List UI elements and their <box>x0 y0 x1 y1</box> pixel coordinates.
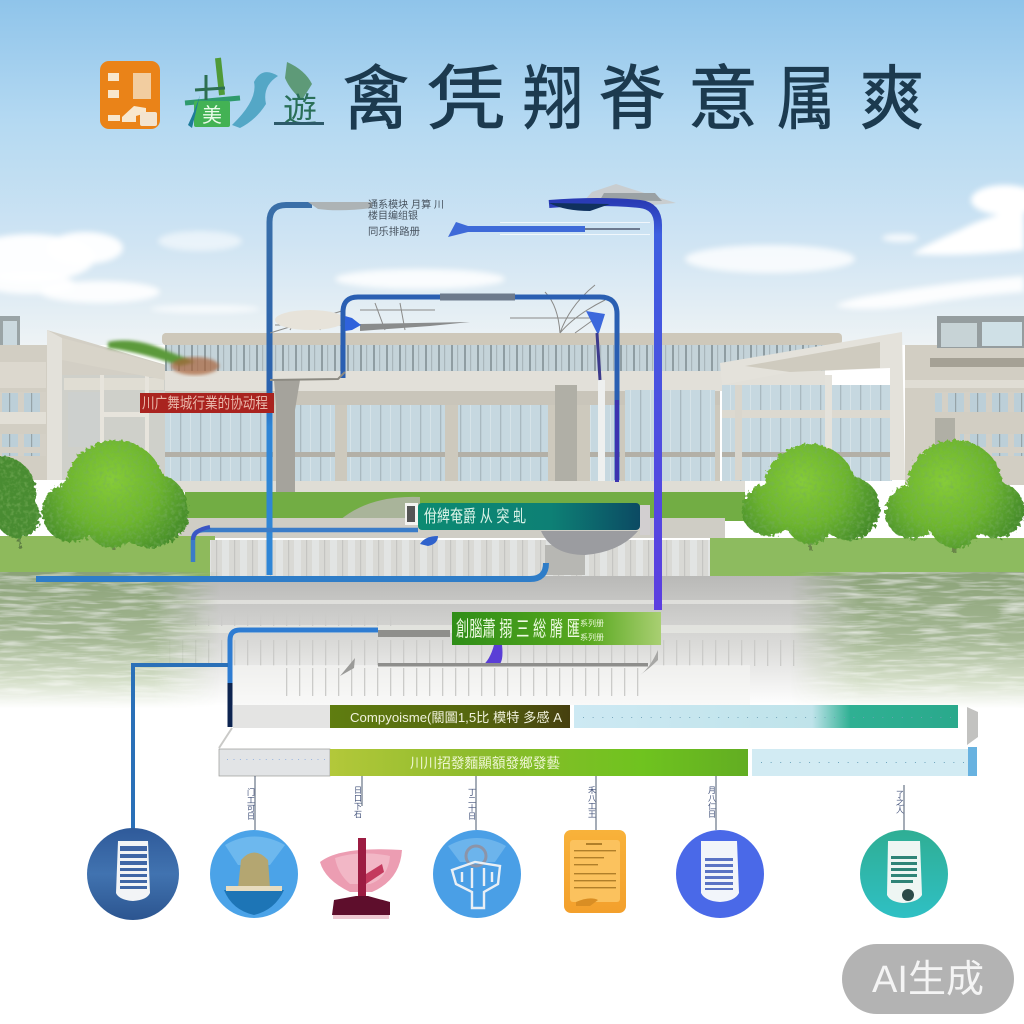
green label: 系列册 <box>580 618 604 628</box>
icon 2: monument in circle <box>210 830 298 918</box>
clouds <box>0 185 1024 313</box>
green label: 創腦蕭 搦 三 総 膌 匯 <box>456 618 580 641</box>
pipe label: top: 通系模块 月算 川 <box>368 198 444 211</box>
pipe label: top <box>368 198 444 238</box>
arrow: middle-left pointer <box>345 316 361 331</box>
pipe label: top: 楼目编组银 <box>368 209 418 222</box>
title: 意 <box>688 60 758 138</box>
title logo: green calligraphic mark: 美 <box>202 104 222 127</box>
teal label underside <box>541 531 638 555</box>
teal label <box>405 503 650 535</box>
timeline bar: lower: 川川招發麵顯額發鄉發藝 <box>410 755 560 771</box>
title: 脊 <box>599 60 665 138</box>
icon 3: pink tree <box>320 838 402 919</box>
funnel pointer <box>586 311 605 380</box>
timeline bar: lower: · · · · · · · · · · · · · · · · · · · · · · <box>760 757 965 767</box>
pipe: long horizontal <box>36 563 546 579</box>
icon 4: maze emblem in circle <box>433 830 521 918</box>
timeline bar: lower: · · · · · · · · · · · · · · · · <box>226 754 326 764</box>
lower reflection and grey water bands <box>0 540 1024 706</box>
tree: left <box>42 440 188 550</box>
icon 5: orange document <box>564 830 626 913</box>
connector labels: 日口下石 <box>354 786 362 819</box>
title logo: green calligraphic mark <box>185 58 324 130</box>
pipe: tall left blue <box>270 202 372 575</box>
title logo: orange badge <box>100 61 160 129</box>
AI badge: AI生成 <box>872 959 984 1001</box>
pipe: teal label feed <box>193 527 418 562</box>
title: 凭 <box>427 60 505 138</box>
arrow: top blue pointer <box>448 222 650 237</box>
pipe: middle arch <box>270 294 617 482</box>
sky background <box>0 0 1024 345</box>
teal label: 佾綼奄爵 从 突 虬 <box>424 507 526 526</box>
building: central block <box>162 333 842 518</box>
roof garden sketches <box>270 285 605 333</box>
title: 禽 <box>343 60 409 138</box>
pipe label: top: 同乐排路册 <box>368 225 420 238</box>
connector labels: 月八仁日 <box>708 786 716 819</box>
building: left wing <box>0 316 190 480</box>
tree: right centre <box>742 444 880 550</box>
icon 1: blue document <box>87 828 179 920</box>
title <box>343 60 924 138</box>
title: 属 <box>777 60 835 138</box>
roof canopy <box>582 184 676 206</box>
tree: right <box>885 440 1024 553</box>
connector labels: 禾八工王 <box>588 786 596 818</box>
grey connector bar <box>340 650 658 676</box>
green label: 系列册 <box>580 632 604 642</box>
connector labels <box>246 776 904 830</box>
building: right wing <box>720 316 1024 485</box>
red banner: 川广舞城行業的协动程 <box>142 395 268 412</box>
title: 爽 <box>860 60 924 138</box>
tree reflection right <box>790 572 1024 708</box>
connector labels: 门工可日 <box>246 787 256 821</box>
pipe: tall right purple <box>549 202 658 610</box>
connector labels: 了之人 <box>896 790 904 814</box>
icon 6: blue document <box>676 830 764 918</box>
tree reflection left <box>0 572 220 708</box>
AI badge <box>842 944 1014 1014</box>
lawn <box>0 492 1024 576</box>
green label <box>452 612 661 645</box>
timeline bar: upper: Compyoisme(關圖1,5比 模特 多感 A <box>350 710 562 725</box>
pipe: first icon feed <box>133 665 228 830</box>
pipe: tall connector to bars <box>219 630 450 748</box>
timeline bar: upper: · · · · · · · · · · · · · · · · · · · · · · · · · · · · · · · · · · · · · · · <box>582 712 952 722</box>
timeline bar: upper <box>233 705 978 745</box>
title: 翔 <box>523 60 583 138</box>
connector labels: 丁二十日 <box>468 788 476 821</box>
roof planting <box>108 340 219 375</box>
purple connector <box>482 645 502 666</box>
icon 7: teal document <box>860 830 948 918</box>
title logo: green calligraphic mark: 遊 <box>283 92 317 130</box>
small blue pointer <box>420 536 438 546</box>
tree: far left <box>0 456 40 548</box>
timeline bar: lower <box>219 747 977 776</box>
